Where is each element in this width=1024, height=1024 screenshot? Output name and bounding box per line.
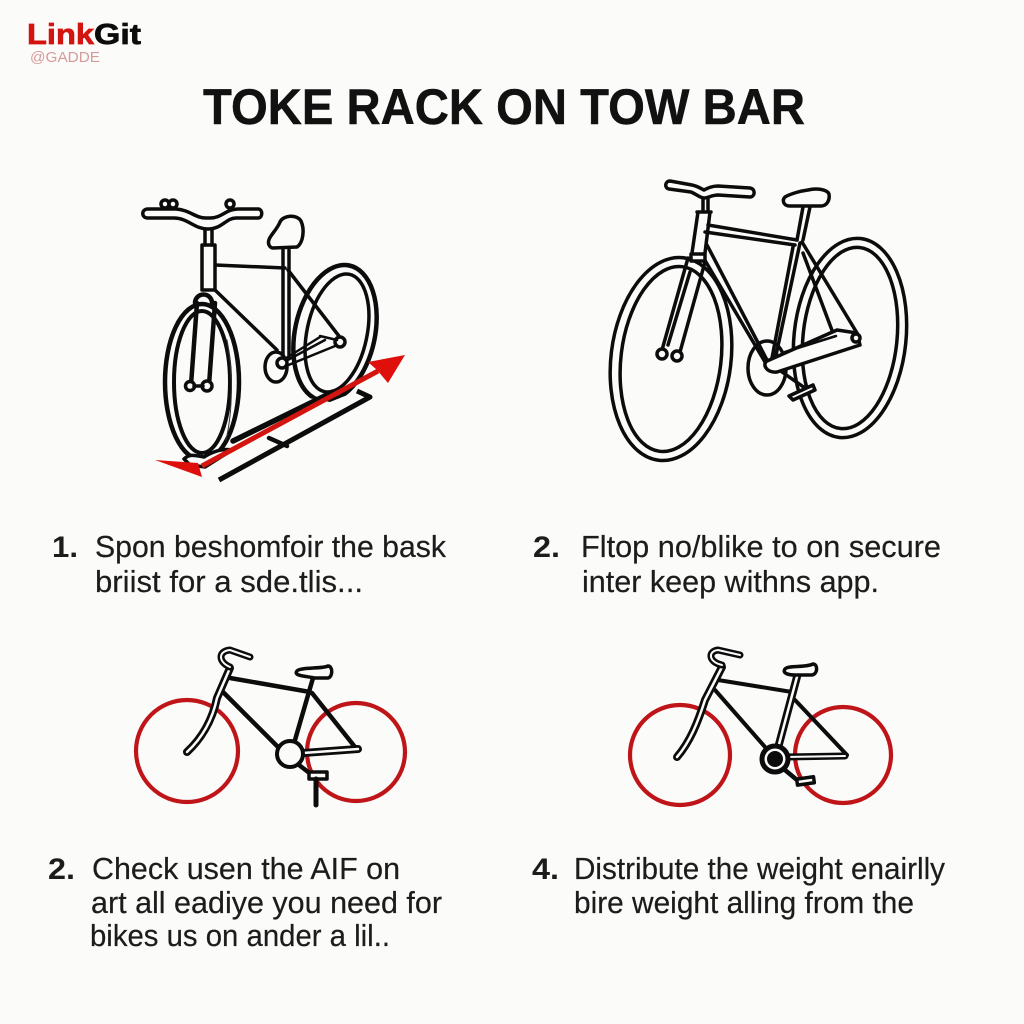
front wheel [599, 250, 743, 468]
pedal [785, 770, 814, 785]
saddle [268, 216, 303, 248]
step 4 text: 4. [532, 853, 559, 886]
step 1 text [52, 530, 447, 599]
step 1 text: 1. [52, 531, 78, 564]
step 2 text: inter keep withns app. [582, 565, 879, 599]
bottom bracket [277, 741, 303, 767]
saddle [784, 664, 817, 675]
step 3 text: Check usen the AIF on [92, 852, 400, 886]
saddle [296, 666, 332, 678]
handlebar [221, 650, 250, 667]
step 2 text [533, 530, 941, 599]
fork [187, 668, 230, 752]
illustration: bike on rack with red arrow [143, 200, 405, 480]
frame [202, 229, 345, 382]
crank and chainring [748, 341, 815, 400]
fork [677, 667, 722, 757]
step 3 text: 2. [48, 853, 75, 886]
saddle [783, 189, 829, 206]
logo: Git [94, 19, 141, 51]
brake levers [161, 200, 234, 208]
frame [715, 680, 847, 755]
step 3 text [48, 852, 442, 953]
pedal [299, 765, 327, 805]
rack rails [219, 391, 370, 480]
red wheels [630, 705, 891, 805]
fork [657, 254, 705, 361]
illustration: bike angled [599, 181, 916, 468]
step 2 text: Fltop no/blike to on secure [581, 530, 941, 564]
front wheel [165, 294, 239, 460]
chainstay [303, 749, 358, 753]
red wheels [136, 700, 405, 802]
rear wheel [282, 257, 388, 432]
step 1 text: briist for a sde.tlis... [95, 565, 363, 599]
handlebar [711, 650, 740, 665]
red arrow [155, 355, 405, 477]
handlebar [143, 209, 262, 229]
title: TOKE RACK ON TOW BAR [203, 79, 805, 135]
rear wheel [784, 233, 916, 443]
frame [692, 197, 860, 372]
chainring [762, 746, 788, 772]
seat tube [778, 673, 798, 748]
tyre clamps [184, 449, 232, 467]
step 1 text: Spon beshomfoir the bask [95, 530, 447, 564]
logo: Link [27, 19, 95, 51]
illustration: bike with red wheels, step 3 [136, 650, 405, 805]
step 4 text [532, 852, 946, 920]
illustration: bike with red wheels, step 4 [630, 650, 891, 805]
logo [27, 19, 141, 66]
logo: @GADDE [30, 49, 100, 66]
step 4 text: Distribute the weight enairlly [574, 852, 946, 886]
frame [223, 678, 355, 747]
chainstay [785, 756, 845, 757]
step 3 text: bikes us on ander a lil.. [90, 919, 390, 953]
handlebar [666, 181, 754, 198]
step 3 text: art all eadiye you need for [91, 886, 442, 920]
step 4 text: bire weight alling from the [574, 886, 914, 920]
step 2 text: 2. [533, 531, 560, 564]
